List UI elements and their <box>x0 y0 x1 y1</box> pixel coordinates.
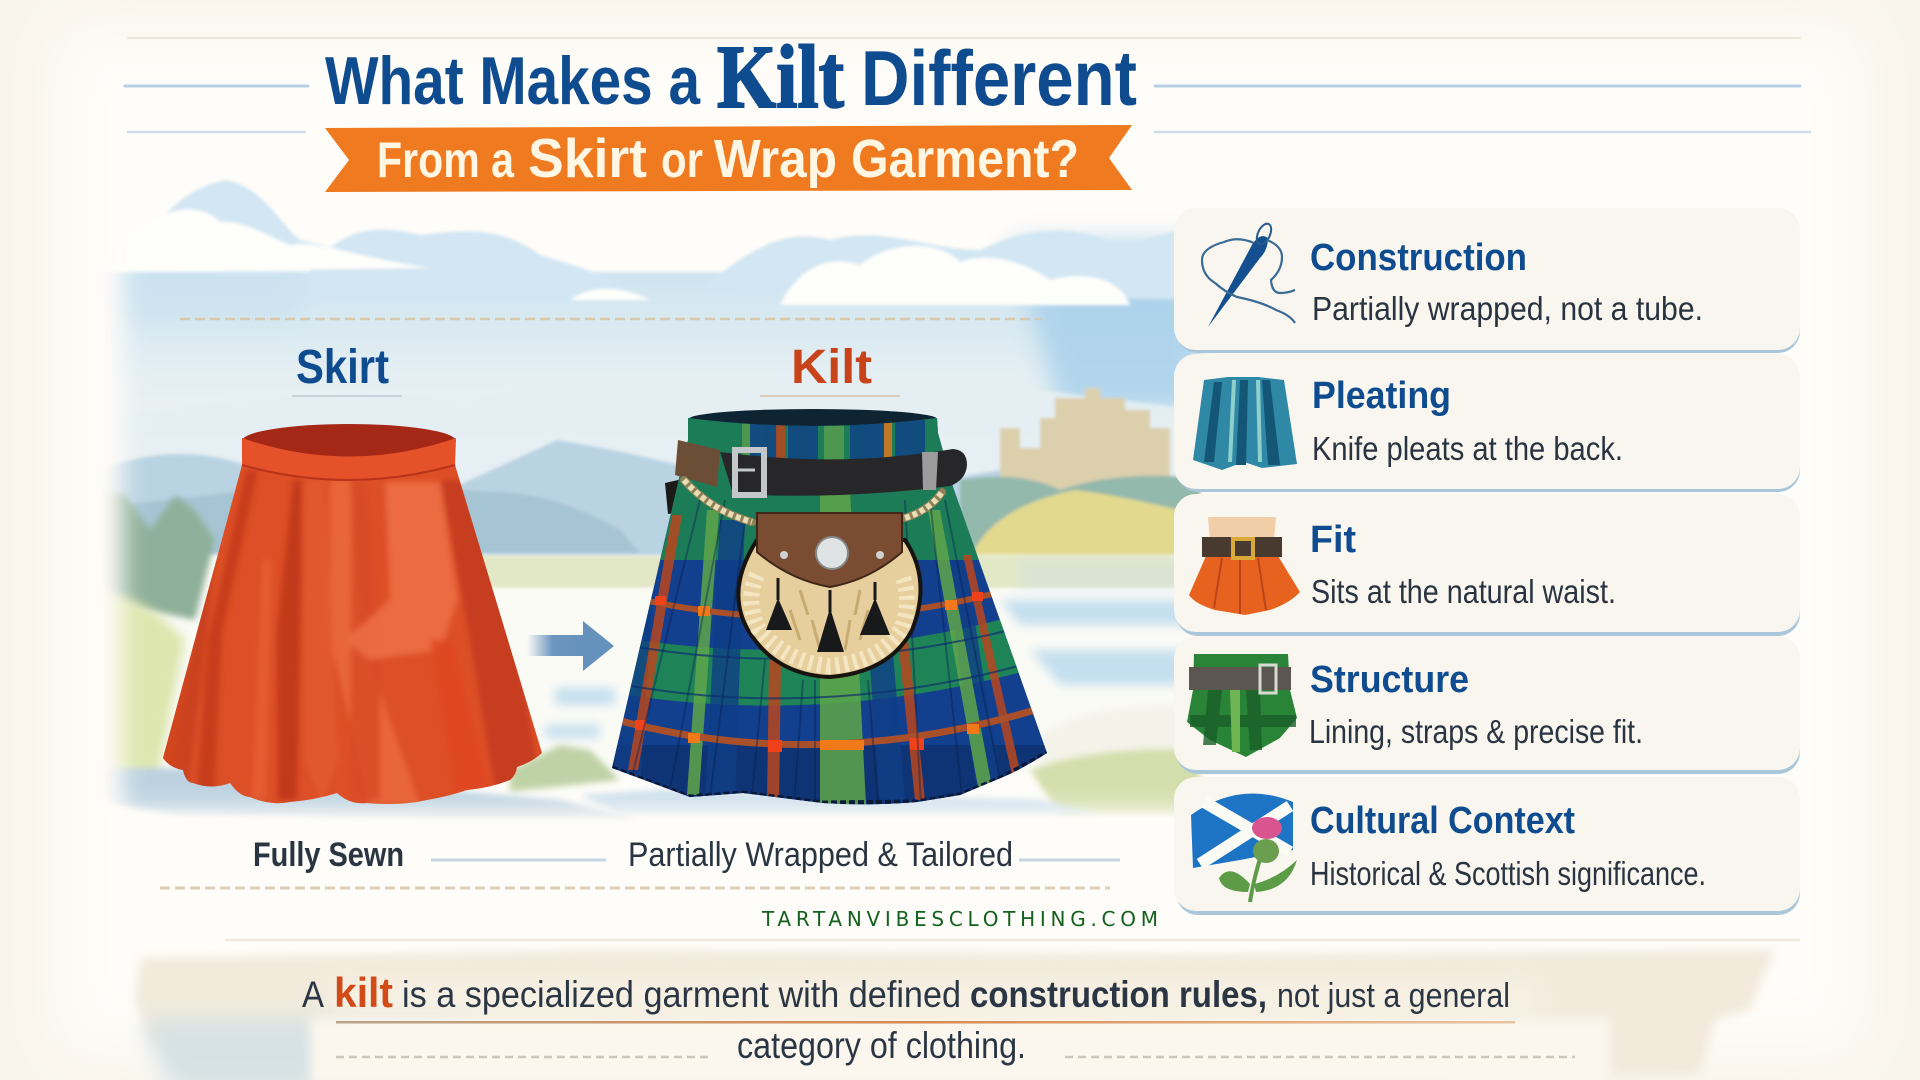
decorative caption rules <box>431 858 1120 862</box>
caption: Partially Wrapped & Tailored: Partially Wrapped & Tailored <box>628 836 1013 874</box>
footer statement <box>302 969 1510 1066</box>
card: Construction <box>1174 208 1800 353</box>
footer statement: not just a general <box>1277 977 1510 1015</box>
card: Fit: Sits at the natural waist. <box>1311 573 1616 610</box>
sporran <box>738 513 921 677</box>
title: Kilt <box>717 28 844 127</box>
heading: Skirt: Skirt <box>296 341 389 394</box>
caption: Fully Sewn: Fully Sewn <box>253 836 404 874</box>
subtitle ribbon: or <box>661 132 703 188</box>
heading: Kilt: Kilt <box>791 341 872 394</box>
shore <box>510 745 620 792</box>
subtitle ribbon: Skirt <box>528 127 647 189</box>
card: Fit: Fit <box>1310 519 1356 561</box>
card: Structure <box>1174 636 1800 774</box>
footer painted band <box>135 950 1775 1080</box>
header rule lines <box>125 38 1810 132</box>
arrow <box>527 621 614 671</box>
castle <box>1000 388 1170 500</box>
sky <box>114 270 1200 416</box>
distant mountains <box>138 392 1176 484</box>
title: What Makes a <box>325 43 701 119</box>
dashed divider bottom <box>160 886 1110 890</box>
footer underline and dashes <box>336 1021 1575 1057</box>
lake <box>207 552 1174 562</box>
footer statement: is a specialized garment with defined <box>402 974 961 1015</box>
icon: saltire flag and thistle <box>1191 794 1297 902</box>
illustration: orange skirt <box>163 424 542 804</box>
card: Structure: Lining, straps & precise fit. <box>1309 713 1643 750</box>
rope chain <box>684 480 942 522</box>
subtitle ribbon <box>325 125 1132 192</box>
card: Construction: Construction <box>1310 237 1527 279</box>
subtitle ribbon: Wrap <box>714 129 837 189</box>
footer statement: kilt <box>334 969 393 1016</box>
dashed divider top <box>180 318 1042 320</box>
footer statement: A <box>302 974 324 1015</box>
card: Pleating: Pleating <box>1312 375 1451 417</box>
footer statement: category of clothing. <box>737 1025 1026 1066</box>
card: Structure: Structure <box>1310 659 1469 701</box>
footer rule line <box>225 939 1800 941</box>
icon: waist and skirt <box>1189 517 1300 615</box>
footer statement: construction rules, <box>970 974 1267 1015</box>
trees <box>100 490 215 620</box>
belt <box>675 440 967 498</box>
icon: pleated fabric <box>1193 377 1297 470</box>
landscape background <box>100 180 1200 820</box>
card: Pleating: Knife pleats at the back. <box>1312 430 1623 467</box>
subtitle ribbon: Garment? <box>851 129 1079 189</box>
title: Different <box>861 34 1137 122</box>
card: Cultural Context <box>1174 777 1800 915</box>
website watermark: TARTANVIBESCLOTHING.COM <box>761 907 1158 931</box>
card: Construction: Partially wrapped, not a tube. <box>1312 290 1703 327</box>
heading: Kilt <box>760 341 900 396</box>
right hills <box>958 474 1202 553</box>
card: Cultural Context: Historical & Scottish significance. <box>1310 855 1706 892</box>
icon: needle and thread <box>1202 221 1295 327</box>
title <box>325 28 1137 127</box>
card: Pleating <box>1174 354 1800 492</box>
card: Fit <box>1174 494 1800 636</box>
icon: green kilt with belt <box>1187 654 1297 757</box>
illustration: tartan kilt with sporran <box>612 409 1047 804</box>
card: Cultural Context: Cultural Context <box>1310 800 1575 842</box>
subtitle ribbon: From a <box>377 132 515 188</box>
